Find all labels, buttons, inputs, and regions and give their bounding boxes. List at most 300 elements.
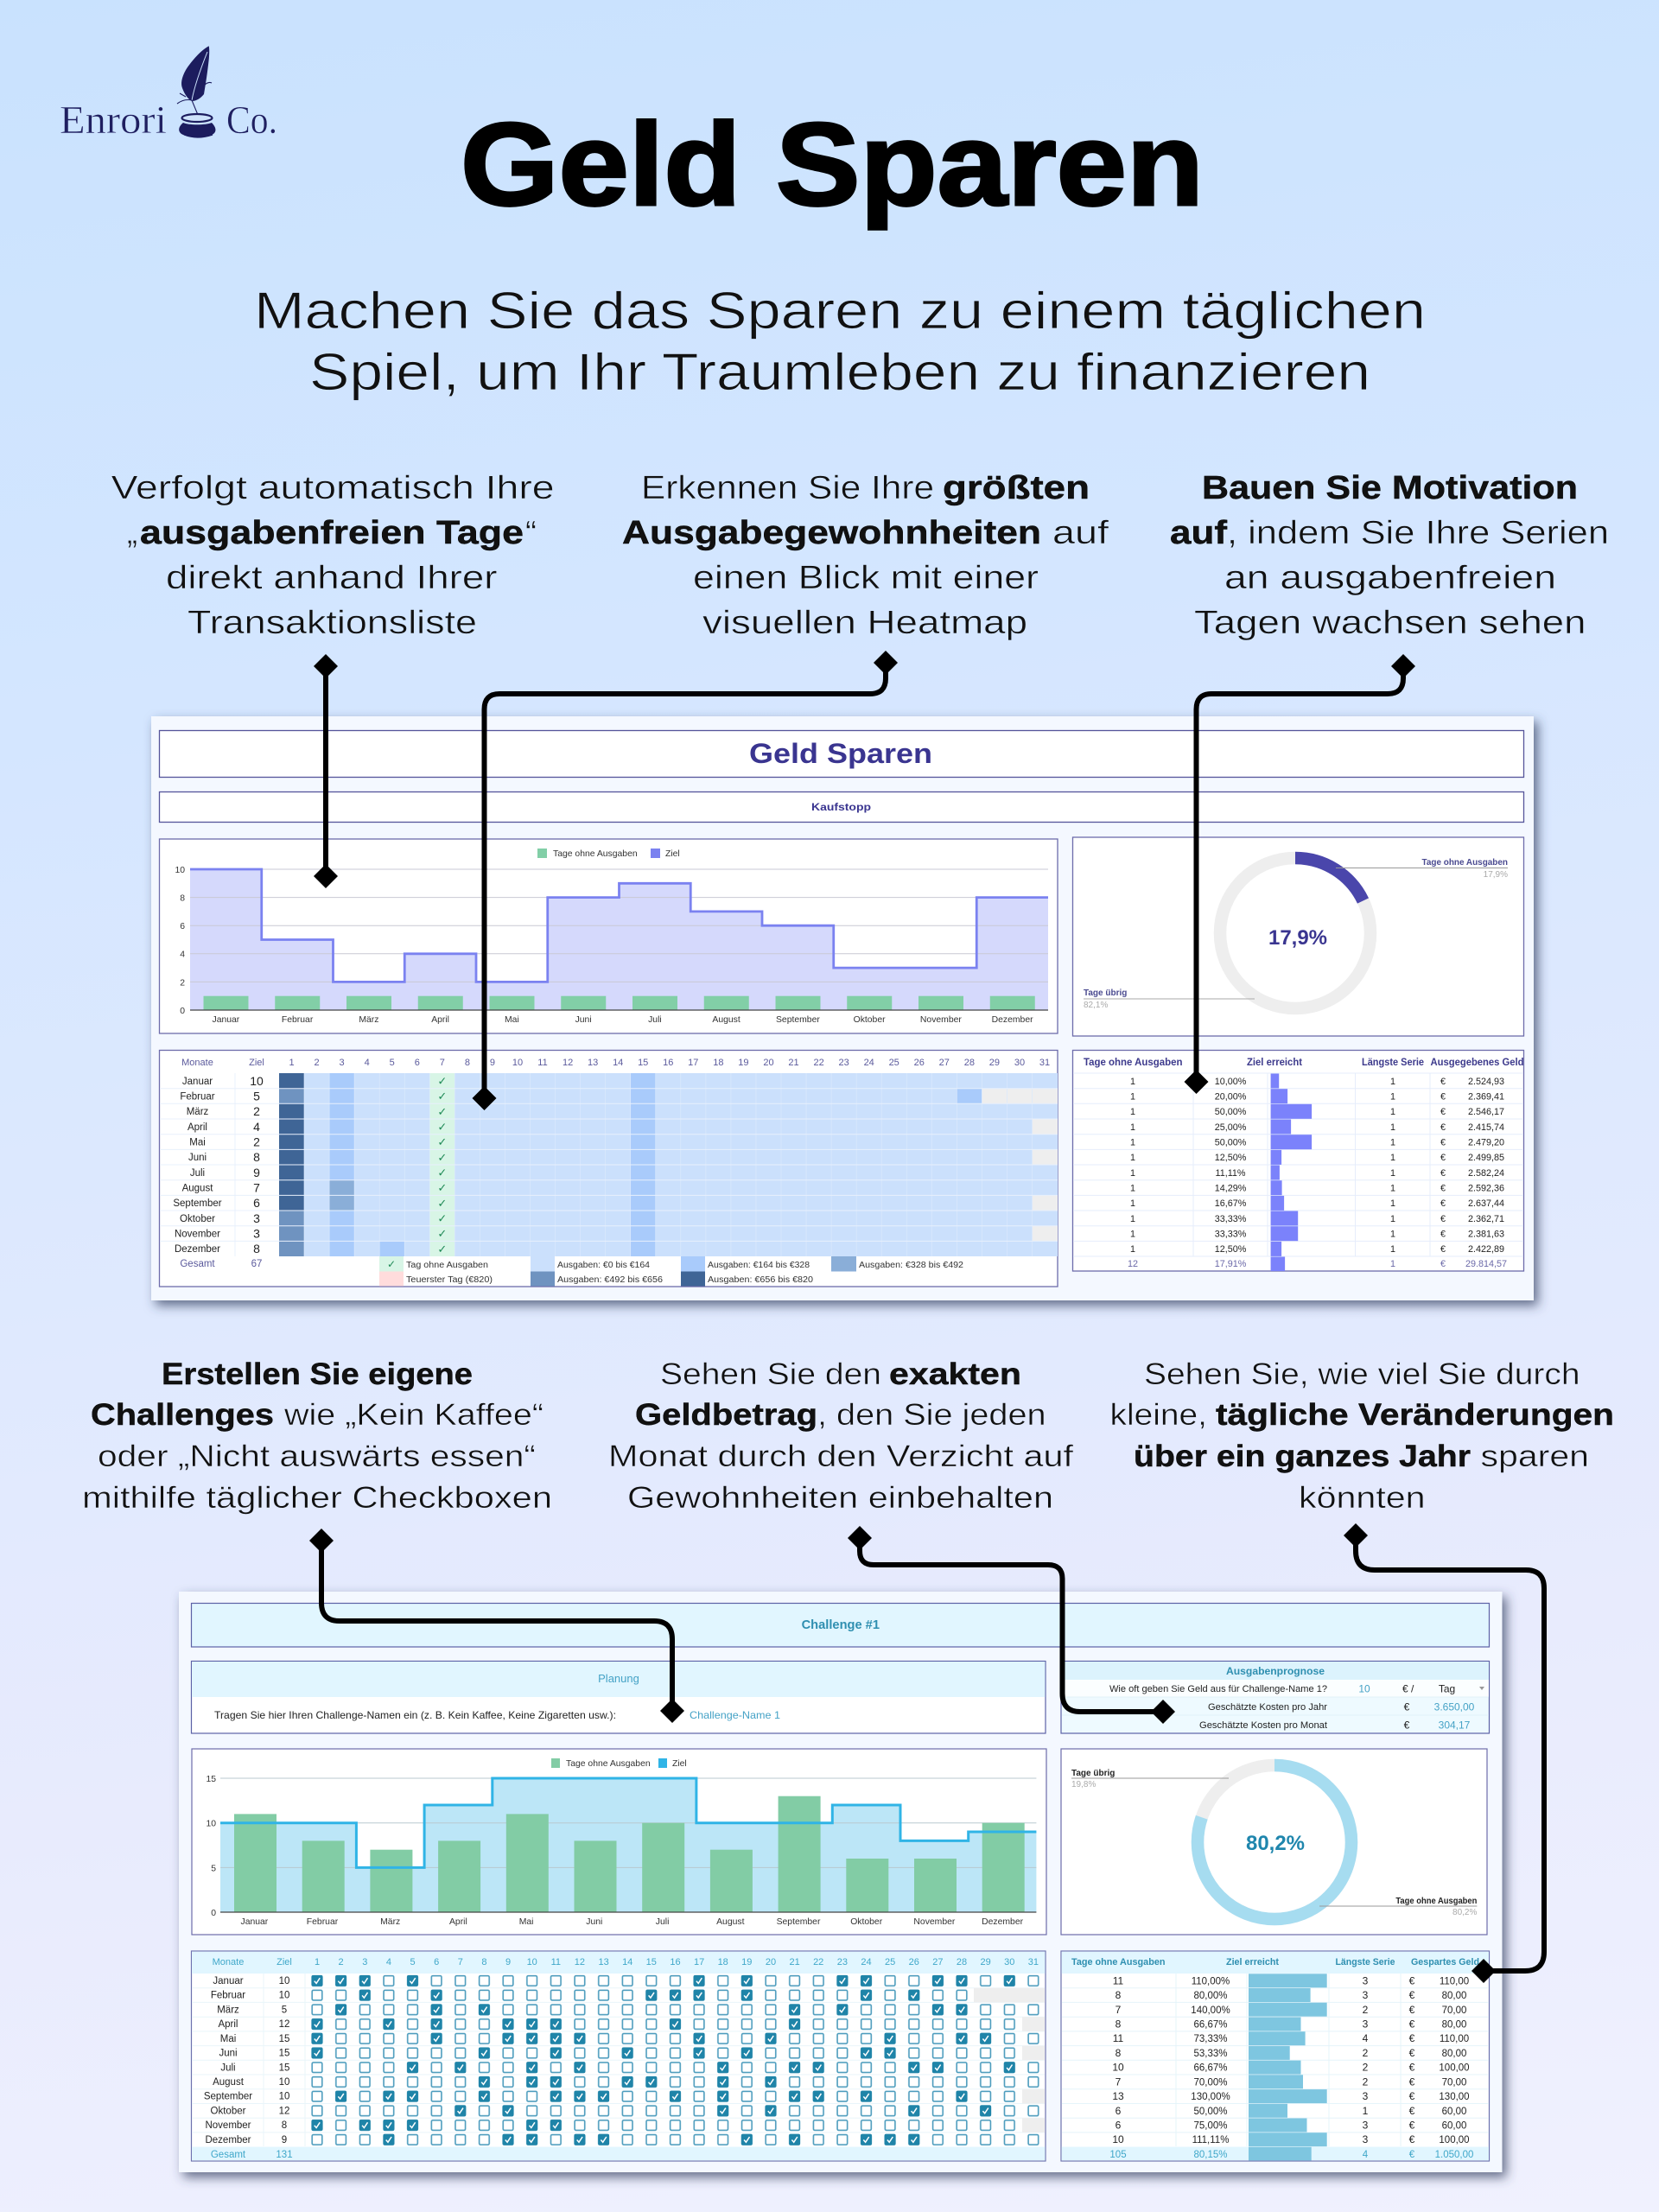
heatmap: daily spending: 2 bbox=[253, 1135, 260, 1149]
table: challenge statistics: 7 bbox=[1116, 2075, 1122, 2088]
step and bar chart: Tage ohne Ausgaben vs Ziel: April bbox=[431, 1015, 449, 1025]
checkbox tracker table: 13 bbox=[598, 1957, 609, 1967]
table: monthly statistics: 50,00% bbox=[1215, 1107, 1247, 1117]
step and bar chart: Challenge: Januar bbox=[241, 1917, 269, 1927]
checkbox tracker table: 8 bbox=[282, 2120, 287, 2131]
table: monthly statistics: € bbox=[1440, 1137, 1446, 1147]
callout: eigene Challenges bbox=[82, 1357, 552, 1515]
table: challenge statistics: 110,00 bbox=[1440, 1976, 1469, 1986]
spending forecast box: € bbox=[1404, 1700, 1410, 1713]
callout: tägliche Veränderungen: kleine, bbox=[1109, 1397, 1207, 1432]
table: challenge statistics: 66,67% bbox=[1193, 2063, 1228, 2074]
heatmap: daily spending: ✓ bbox=[437, 1197, 447, 1210]
table: challenge statistics: 11 bbox=[1113, 1974, 1124, 1986]
step and bar chart: Challenge: November bbox=[913, 1917, 956, 1927]
planning box: Planung bbox=[598, 1672, 639, 1685]
heatmap: daily spending: 9 bbox=[253, 1166, 260, 1179]
checkbox tracker table: 19 bbox=[741, 1957, 752, 1967]
table: challenge statistics: 105 bbox=[1109, 2150, 1127, 2160]
heading box: Challenge #1: Challenge #1 bbox=[802, 1618, 880, 1632]
table: monthly statistics: 1 bbox=[1130, 1168, 1135, 1179]
checkbox tracker table: 10 bbox=[279, 2077, 289, 2088]
table: challenge statistics: € bbox=[1409, 2018, 1415, 2031]
callout: tägliche Veränderungen: sparen bbox=[1481, 1439, 1589, 1473]
step and bar chart: Tage ohne Ausgaben vs Ziel: August bbox=[712, 1015, 741, 1025]
table: challenge statistics: 3 bbox=[1363, 1974, 1369, 1986]
step and bar chart: Tage ohne Ausgaben vs Ziel: 2 bbox=[180, 978, 185, 988]
checkbox tracker table: Juni bbox=[219, 2048, 238, 2058]
callout: tägliche Veränderungen: Sehen Sie, wie viel Sie durch bbox=[1144, 1357, 1580, 1391]
heatmap: daily spending: 5 bbox=[390, 1058, 395, 1068]
callout: exakter Geldbetrag: exakten bbox=[889, 1357, 1021, 1391]
table: monthly statistics: 2.422,89 bbox=[1468, 1244, 1504, 1255]
step and bar chart: Tage ohne Ausgaben vs Ziel: 8 bbox=[180, 894, 185, 904]
step and bar chart: Tage ohne Ausgaben vs Ziel: 10 bbox=[175, 866, 185, 875]
checkbox tracker table: 29 bbox=[980, 1957, 991, 1967]
table: challenge statistics: Längste Serie bbox=[1336, 1957, 1395, 1967]
heatmap: daily spending: 20 bbox=[763, 1058, 774, 1068]
callout: ausgabenfreie Tage: ausgabenfreien Tage bbox=[140, 515, 524, 551]
table: challenge statistics: € bbox=[1409, 2075, 1415, 2088]
table: challenge statistics: 80,00% bbox=[1193, 1991, 1228, 2001]
checkbox tracker table: 4 bbox=[386, 1957, 391, 1967]
step and bar chart: Challenge: März bbox=[380, 1917, 400, 1927]
table: challenge statistics: € bbox=[1409, 2062, 1415, 2074]
donut chart: 80,2% bbox=[1061, 1749, 1487, 1935]
checkbox tracker table: März bbox=[217, 2005, 239, 2015]
table: challenge statistics: 8 bbox=[1116, 2047, 1122, 2059]
arrow: ausgabenfreie Tage to chart bbox=[314, 654, 338, 888]
callout: Ausgabegewohnheiten: auf bbox=[1052, 515, 1109, 551]
subtitle: Spiel, um Ihr Traumleben zu finanzieren bbox=[309, 343, 1370, 401]
table: monthly statistics: € bbox=[1440, 1229, 1446, 1239]
table: challenge statistics: Gespartes Geld bbox=[1411, 1957, 1479, 1967]
table: monthly statistics: Ziel erreicht bbox=[1247, 1058, 1302, 1068]
table: challenge statistics: 80,00 bbox=[1442, 2020, 1466, 2031]
table: challenge statistics: 100,00 bbox=[1439, 2063, 1470, 2074]
table: challenge statistics: 1 bbox=[1363, 2105, 1369, 2117]
heatmap: daily spending: ✓ bbox=[437, 1075, 447, 1087]
table: monthly statistics: Tage ohne Ausgaben bbox=[1084, 1058, 1182, 1068]
step and bar chart: Tage ohne Ausgaben vs Ziel: 0 bbox=[180, 1007, 185, 1016]
checkbox tracker table: 15 bbox=[279, 2048, 289, 2058]
heading box: Kaufstopp bbox=[159, 791, 1524, 823]
table: monthly statistics: 1 bbox=[1130, 1184, 1135, 1194]
callout: Ausgabegewohnheiten: größten bbox=[943, 470, 1090, 506]
table: monthly statistics: 2.637,44 bbox=[1468, 1198, 1504, 1209]
callout: tägliche Veränderungen: könnten bbox=[1299, 1480, 1426, 1515]
callout: Motivation: auf bbox=[1170, 515, 1227, 551]
heatmap legend: Teuerster Tag (€820) bbox=[406, 1275, 493, 1285]
checkbox tracker table: 17 bbox=[694, 1957, 704, 1967]
step and bar chart: Tage ohne Ausgaben vs Ziel: September bbox=[776, 1015, 820, 1025]
heatmap legend: Ausgaben: €328 bis €492 bbox=[859, 1261, 963, 1270]
checkbox tracker table: 16 bbox=[670, 1957, 681, 1967]
table: monthly statistics: 1 bbox=[1130, 1153, 1135, 1163]
heatmap: daily spending: 27 bbox=[939, 1058, 950, 1068]
table: monthly statistics: 1 bbox=[1390, 1077, 1395, 1087]
heatmap: daily spending: 3 bbox=[340, 1058, 345, 1068]
table: monthly statistics: 2.592,36 bbox=[1468, 1184, 1504, 1194]
checkbox tracker table: 22 bbox=[813, 1957, 823, 1967]
heatmap legend: Ausgaben: €492 bis €656 bbox=[557, 1275, 663, 1285]
table: monthly statistics: 2.362,71 bbox=[1468, 1214, 1504, 1224]
table: challenge statistics: 50,00% bbox=[1193, 2107, 1228, 2117]
checkbox tracker table: September bbox=[204, 2092, 252, 2102]
heatmap: daily spending: November bbox=[175, 1229, 220, 1239]
callout: eigene Challenges: oder „Nicht auswärts essen“ bbox=[98, 1439, 536, 1473]
table: challenge statistics: 8 bbox=[1116, 1989, 1122, 2001]
callout: exakter Geldbetrag: Gewohnheiten einbehalten bbox=[627, 1480, 1053, 1515]
callout: ausgabenfreie Tage: Verfolgt automatisch Ihre bbox=[111, 470, 555, 506]
donut chart: 17,9% bbox=[1073, 837, 1524, 1036]
donut chart: 17,9%: 17,9% bbox=[1484, 870, 1508, 880]
checkbox tracker table: 9 bbox=[282, 2135, 287, 2145]
heatmap: daily spending: 30 bbox=[1014, 1058, 1025, 1068]
callout: Motivation: an ausgabenfreien bbox=[1224, 560, 1556, 596]
heatmap: daily spending: Juni bbox=[188, 1153, 207, 1163]
table: monthly statistics: 2.415,74 bbox=[1468, 1122, 1504, 1133]
heatmap: daily spending: Mai bbox=[189, 1137, 206, 1147]
table: challenge statistics: 111,11% bbox=[1192, 2135, 1229, 2145]
table: challenge statistics: 8 bbox=[1116, 2018, 1122, 2031]
callout: ausgabenfreie Tage: „ bbox=[127, 515, 137, 551]
table: monthly statistics: 1 bbox=[1390, 1168, 1395, 1179]
table: monthly statistics: 2.369,41 bbox=[1468, 1092, 1504, 1103]
arrow: Motivation to table bbox=[1184, 654, 1415, 1094]
panel: Kaufstopp dashboard bbox=[151, 716, 1534, 1300]
table: challenge statistics: € bbox=[1409, 2133, 1415, 2145]
table: challenge statistics: 3 bbox=[1363, 1989, 1369, 2001]
table: monthly statistics: 12,50% bbox=[1215, 1244, 1247, 1255]
step and bar chart: Tage ohne Ausgaben vs Ziel: Ziel bbox=[665, 849, 680, 859]
table: challenge statistics: 7 bbox=[1116, 2004, 1122, 2016]
checkbox tracker table: April bbox=[218, 2019, 238, 2030]
heatmap: daily spending: 4 bbox=[253, 1120, 260, 1134]
subtitle: Machen Sie das Sparen zu einem täglichen bbox=[254, 282, 1426, 340]
table: challenge statistics: 110,00 bbox=[1440, 2034, 1469, 2044]
callout: Ausgabegewohnheiten: einen Blick mit einer bbox=[693, 560, 1039, 596]
heatmap: daily spending: 10 bbox=[250, 1074, 264, 1088]
heatmap: daily spending: 22 bbox=[813, 1058, 824, 1068]
heatmap: daily spending: ✓ bbox=[437, 1227, 447, 1240]
heatmap: daily spending: ✓ bbox=[437, 1211, 447, 1225]
heatmap: daily spending: 28 bbox=[964, 1058, 975, 1068]
table: challenge statistics: 80,15% bbox=[1193, 2150, 1228, 2160]
table: monthly statistics: € bbox=[1440, 1122, 1446, 1133]
heatmap: daily spending: Dezember bbox=[175, 1244, 220, 1255]
heatmap: daily spending: 5 bbox=[253, 1089, 260, 1103]
step and bar chart: Challenge: August bbox=[716, 1917, 745, 1927]
table: challenge statistics: € bbox=[1409, 2090, 1415, 2102]
checkbox tracker table: 8 bbox=[481, 1957, 486, 1967]
callout: Ausgabegewohnheiten: Ausgabegewohnheiten bbox=[622, 515, 1041, 551]
table: monthly statistics: 1 bbox=[1390, 1184, 1395, 1194]
heatmap: daily spending: 67 bbox=[251, 1259, 262, 1269]
step and bar chart: Challenge bbox=[192, 1749, 1046, 1935]
callout: ausgabenfreie Tage: direkt anhand Ihrer bbox=[166, 560, 498, 596]
planning box bbox=[192, 1661, 1046, 1733]
arrow: Ausgabegewohnheiten to heatmap bbox=[472, 651, 898, 1110]
checkbox tracker table: Oktober bbox=[211, 2106, 246, 2116]
table: challenge statistics: 100,00 bbox=[1439, 2135, 1470, 2145]
step and bar chart: Tage ohne Ausgaben vs Ziel: Juli bbox=[648, 1015, 662, 1025]
step and bar chart: Tage ohne Ausgaben vs Ziel: Juni bbox=[575, 1015, 592, 1025]
checkbox tracker table: 6 bbox=[434, 1957, 439, 1967]
heatmap: daily spending: 17 bbox=[688, 1058, 698, 1068]
table: challenge statistics: 140,00% bbox=[1191, 2005, 1230, 2016]
checkbox tracker table: Gesamt bbox=[211, 2150, 246, 2160]
table: monthly statistics: 17,91% bbox=[1215, 1259, 1247, 1269]
planning box: Tragen Sie hier Ihren Challenge-Namen ein (z. B. Kein Kaffee, Keine Zigaretten usw.): bbox=[214, 1709, 616, 1721]
checkbox tracker table: Mai bbox=[220, 2034, 236, 2044]
step and bar chart: Challenge: Juli bbox=[656, 1917, 669, 1927]
heatmap: daily spending: 16 bbox=[663, 1058, 673, 1068]
table: challenge statistics: € bbox=[1409, 1974, 1415, 1986]
heatmap: daily spending: März bbox=[187, 1107, 209, 1117]
planning box: Challenge-Name 1 bbox=[690, 1709, 780, 1721]
checkbox tracker table: August bbox=[213, 2077, 245, 2088]
callout: tägliche Veränderungen bbox=[1109, 1357, 1614, 1515]
donut chart: 80,2%: Tage übrig bbox=[1071, 1769, 1115, 1778]
table: challenge statistics: 2 bbox=[1363, 2062, 1369, 2074]
checkbox tracker table: Ziel bbox=[276, 1957, 292, 1967]
table: monthly statistics: 1 bbox=[1390, 1092, 1395, 1103]
checkbox tracker table: Januar bbox=[213, 1976, 244, 1986]
table: monthly statistics: Ausgegebenes Geld bbox=[1431, 1058, 1524, 1068]
heading box: Geld Sparen: Geld Sparen bbox=[749, 738, 932, 769]
heatmap: daily spending: August bbox=[182, 1184, 213, 1194]
heatmap: daily spending: 18 bbox=[713, 1058, 724, 1068]
heatmap: daily spending: April bbox=[188, 1122, 207, 1133]
checkbox tracker table: 30 bbox=[1004, 1957, 1014, 1967]
table: challenge statistics: 70,00% bbox=[1193, 2077, 1228, 2088]
step and bar chart: Challenge: Februar bbox=[307, 1917, 339, 1927]
table: monthly statistics: 1 bbox=[1390, 1229, 1395, 1239]
heatmap legend: Tag ohne Ausgaben bbox=[406, 1261, 488, 1270]
step and bar chart: Tage ohne Ausgaben vs Ziel: November bbox=[920, 1015, 962, 1025]
callout: ausgabenfreie Tage: Transaktionsliste bbox=[188, 605, 477, 641]
checkbox tracker table: 31 bbox=[1028, 1957, 1039, 1967]
heatmap: daily spending: 4 bbox=[365, 1058, 370, 1068]
heatmap: daily spending: 7 bbox=[253, 1180, 260, 1194]
step and bar chart: Challenge: Ziel bbox=[672, 1759, 687, 1769]
table: challenge statistics: € bbox=[1409, 1989, 1415, 2001]
panel: Challenge dashboard bbox=[179, 1592, 1502, 2172]
table: challenge statistics: 3 bbox=[1363, 2133, 1369, 2145]
spending forecast box: Geschätzte Kosten pro Jahr bbox=[1208, 1702, 1327, 1713]
heatmap: daily spending: Januar bbox=[182, 1077, 213, 1087]
heatmap: daily spending: Oktober bbox=[180, 1214, 215, 1224]
table: challenge statistics: € bbox=[1409, 2150, 1415, 2160]
heatmap: daily spending: 21 bbox=[788, 1058, 799, 1068]
spending forecast box: Ausgabenprognose bbox=[1226, 1665, 1325, 1677]
table: challenge statistics: 70,00 bbox=[1442, 2077, 1466, 2088]
spending forecast box: 3.650,00 bbox=[1434, 1700, 1475, 1713]
callout: ausgabenfreie Tage: “ bbox=[525, 515, 537, 551]
heatmap: daily spending: 8 bbox=[465, 1058, 470, 1068]
table: monthly statistics: € bbox=[1440, 1107, 1446, 1117]
table: monthly statistics: 2.499,85 bbox=[1468, 1153, 1504, 1163]
table: challenge statistics: 70,00 bbox=[1442, 2005, 1466, 2016]
callout: eigene Challenges: Challenges bbox=[91, 1397, 274, 1432]
table: monthly statistics: 1 bbox=[1130, 1077, 1135, 1087]
heatmap: daily spending: 1 bbox=[289, 1058, 295, 1068]
table: monthly statistics: 2.479,20 bbox=[1468, 1137, 1504, 1147]
table: challenge statistics: 80,00 bbox=[1442, 2049, 1466, 2059]
callout: exakter Geldbetrag: Geldbetrag bbox=[635, 1397, 817, 1432]
spending forecast box: Geschätzte Kosten pro Monat bbox=[1199, 1720, 1327, 1731]
table: monthly statistics: 2.524,93 bbox=[1468, 1077, 1504, 1087]
table: challenge statistics: € bbox=[1409, 2032, 1415, 2044]
checkbox tracker table: 12 bbox=[279, 2019, 289, 2030]
checkbox tracker table: 7 bbox=[458, 1957, 463, 1967]
table: monthly statistics: 1 bbox=[1130, 1137, 1135, 1147]
checkbox tracker table: Februar bbox=[211, 1991, 245, 2001]
checkbox tracker table: Dezember bbox=[205, 2135, 251, 2145]
heatmap: daily spending: 2 bbox=[253, 1104, 260, 1118]
checkbox tracker table: 10 bbox=[527, 1957, 537, 1967]
heatmap: daily spending: 11 bbox=[537, 1058, 548, 1068]
subtitle bbox=[254, 282, 1426, 401]
heatmap: daily spending: 29 bbox=[989, 1058, 1000, 1068]
table: monthly statistics: € bbox=[1440, 1184, 1446, 1194]
heatmap: daily spending: 19 bbox=[738, 1058, 749, 1068]
table: monthly statistics: € bbox=[1440, 1214, 1446, 1224]
spending forecast box: Wie oft geben Sie Geld aus für Challenge-Name 1? bbox=[1109, 1684, 1327, 1694]
checkbox tracker table: 25 bbox=[885, 1957, 895, 1967]
table: challenge statistics: 53,33% bbox=[1193, 2049, 1228, 2059]
step and bar chart: Challenge: 0 bbox=[211, 1909, 216, 1918]
heatmap legend: Ausgaben: €0 bis €164 bbox=[557, 1261, 650, 1270]
checkbox tracker table: 20 bbox=[766, 1957, 776, 1967]
checkbox tracker table: 23 bbox=[837, 1957, 848, 1967]
table: challenge statistics: 80,00 bbox=[1442, 1991, 1466, 2001]
table: monthly statistics: € bbox=[1440, 1077, 1446, 1087]
callout: Motivation: Tagen wachsen sehen bbox=[1194, 605, 1586, 641]
heading box: Geld Sparen bbox=[159, 731, 1524, 778]
callout: exakter Geldbetrag: Monat durch den Verzicht auf bbox=[608, 1439, 1073, 1473]
table: challenge statistics: € bbox=[1409, 2004, 1415, 2016]
step and bar chart: Challenge: Juni bbox=[586, 1917, 602, 1927]
checkbox tracker table: 24 bbox=[861, 1957, 872, 1967]
callout: Motivation bbox=[1170, 470, 1609, 641]
table: monthly statistics: 1 bbox=[1390, 1107, 1395, 1117]
table: monthly statistics: € bbox=[1440, 1168, 1446, 1179]
table: challenge statistics: 10 bbox=[1112, 2133, 1124, 2145]
heatmap: daily spending: 8 bbox=[253, 1150, 260, 1164]
heatmap: daily spending: ✓ bbox=[437, 1135, 447, 1148]
checkbox tracker table: 9 bbox=[505, 1957, 511, 1967]
heatmap: daily spending: 25 bbox=[889, 1058, 899, 1068]
heatmap legend: ✓ bbox=[387, 1258, 396, 1270]
step and bar chart: Challenge: 10 bbox=[206, 1820, 216, 1829]
checkbox tracker table: 10 bbox=[279, 2092, 289, 2102]
donut chart: 80,2%: 19,8% bbox=[1071, 1780, 1096, 1789]
step and bar chart: Challenge: 5 bbox=[211, 1864, 216, 1873]
heatmap: daily spending: 7 bbox=[440, 1058, 445, 1068]
donut chart: 80,2%: 80,2% bbox=[1452, 1908, 1478, 1917]
heatmap: daily spending: 15 bbox=[638, 1058, 648, 1068]
donut chart: 17,9%: Tage ohne Ausgaben bbox=[1422, 858, 1508, 868]
table: monthly statistics: 1 bbox=[1130, 1092, 1135, 1103]
donut chart: 80,2%: Tage ohne Ausgaben bbox=[1395, 1897, 1477, 1906]
checkbox tracker table: 15 bbox=[279, 2034, 289, 2044]
heatmap: daily spending: 6 bbox=[253, 1196, 260, 1210]
checkbox tracker table: 1 bbox=[315, 1957, 320, 1967]
heatmap: daily spending: 13 bbox=[588, 1058, 598, 1068]
heatmap legend: Ausgaben: €656 bis €820 bbox=[708, 1275, 813, 1285]
table: monthly statistics: 1 bbox=[1130, 1229, 1135, 1239]
step and bar chart: Challenge: September bbox=[777, 1917, 821, 1927]
table: monthly statistics: 12 bbox=[1128, 1259, 1138, 1269]
table: monthly statistics: 29.814,57 bbox=[1465, 1259, 1507, 1269]
checkbox tracker table: 28 bbox=[957, 1957, 967, 1967]
step and bar chart: Tage ohne Ausgaben vs Ziel: Tage ohne Ausgaben bbox=[553, 849, 638, 859]
checkbox tracker table: Juli bbox=[220, 2063, 236, 2073]
checkbox tracker table bbox=[192, 1951, 1046, 2161]
table: challenge statistics: Ziel erreicht bbox=[1226, 1957, 1279, 1967]
heatmap: daily spending: 26 bbox=[914, 1058, 925, 1068]
table: monthly statistics: 33,33% bbox=[1215, 1214, 1247, 1224]
heatmap: daily spending: 8 bbox=[253, 1242, 260, 1255]
checkbox tracker table: 11 bbox=[551, 1957, 561, 1967]
table: challenge statistics: 3 bbox=[1363, 2018, 1369, 2031]
table: challenge statistics: 13 bbox=[1112, 2090, 1124, 2102]
donut chart: 17,9%: Tage übrig bbox=[1084, 988, 1127, 998]
spending forecast box bbox=[1061, 1661, 1490, 1733]
table: challenge statistics: 73,33% bbox=[1193, 2034, 1228, 2044]
checkbox tracker table: 2 bbox=[339, 1957, 344, 1967]
table: challenge statistics: € bbox=[1409, 2119, 1415, 2131]
table: challenge statistics: 110,00% bbox=[1192, 1976, 1230, 1986]
heatmap: daily spending: 2 bbox=[315, 1058, 320, 1068]
heatmap: daily spending bbox=[159, 1051, 1058, 1287]
checkbox tracker table: 15 bbox=[279, 2063, 289, 2073]
table: monthly statistics: 2.381,63 bbox=[1468, 1229, 1504, 1239]
step and bar chart: Tage ohne Ausgaben vs Ziel: Dezember bbox=[992, 1015, 1033, 1025]
table: monthly statistics: 1 bbox=[1390, 1122, 1395, 1133]
table: challenge statistics: € bbox=[1409, 2047, 1415, 2059]
table: monthly statistics: 10,00% bbox=[1215, 1077, 1247, 1087]
table: challenge statistics: 6 bbox=[1116, 2105, 1122, 2117]
heatmap: daily spending: 14 bbox=[613, 1058, 623, 1068]
table: monthly statistics: 1 bbox=[1390, 1137, 1395, 1147]
spending forecast box: 304,17 bbox=[1439, 1719, 1471, 1732]
step and bar chart: Challenge: 15 bbox=[206, 1775, 216, 1784]
logo: Enrori Co.: Co. bbox=[226, 99, 277, 142]
heatmap: daily spending: Ziel bbox=[249, 1058, 264, 1068]
heatmap: daily spending: 10 bbox=[512, 1058, 523, 1068]
heatmap: daily spending: ✓ bbox=[437, 1090, 447, 1103]
table: monthly statistics: € bbox=[1440, 1198, 1446, 1209]
heatmap: daily spending: 12 bbox=[563, 1058, 573, 1068]
table: monthly statistics: 20,00% bbox=[1215, 1092, 1247, 1103]
callout: Ausgabegewohnheiten bbox=[622, 470, 1109, 641]
spending forecast box: € bbox=[1404, 1719, 1410, 1732]
heatmap: daily spending: ✓ bbox=[437, 1105, 447, 1118]
step and bar chart: Challenge: Tage ohne Ausgaben bbox=[566, 1759, 651, 1769]
checkbox tracker table: 5 bbox=[410, 1957, 416, 1967]
checkbox tracker table: 3 bbox=[362, 1957, 367, 1967]
table: challenge statistics: 60,00 bbox=[1442, 2120, 1466, 2131]
step and bar chart: Tage ohne Ausgaben vs Ziel: Januar bbox=[213, 1015, 240, 1025]
heatmap: daily spending: 23 bbox=[838, 1058, 849, 1068]
donut chart: 17,9%: 17,9% bbox=[1268, 926, 1327, 950]
callout: eigene Challenges: wie „Kein Kaffee“ bbox=[283, 1397, 543, 1432]
checkbox tracker table: November bbox=[205, 2120, 251, 2131]
checkbox tracker table: 14 bbox=[622, 1957, 632, 1967]
